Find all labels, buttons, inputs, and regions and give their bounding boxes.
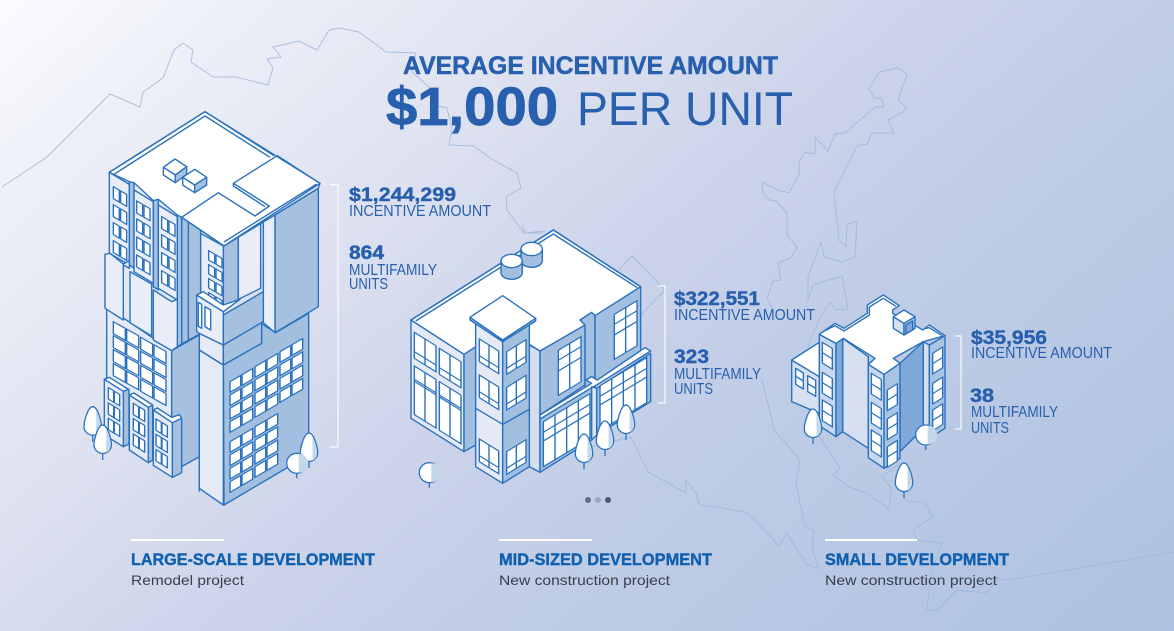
- mid block: [197, 295, 223, 345]
- units: 864: [349, 243, 384, 264]
- center wall: [843, 338, 868, 448]
- roof: [819, 295, 945, 374]
- right wings: [529, 345, 540, 472]
- stats: small development: INCENTIVE AMOUNT: [971, 345, 1112, 362]
- roof: [411, 230, 641, 354]
- bracket: [955, 336, 961, 429]
- per unit: PER UNIT: [577, 82, 793, 135]
- bracket: [330, 184, 338, 447]
- trees: large building: [84, 407, 318, 478]
- caption: small development: New construction project: [825, 572, 997, 588]
- stats: large development: UNITS: [349, 276, 388, 293]
- caption: small development: [825, 539, 1010, 588]
- left wing: [792, 360, 819, 413]
- carousel dots: [585, 497, 611, 503]
- caption: large-scale development: [131, 539, 376, 588]
- roof box: [893, 310, 915, 335]
- trees: small building: [804, 409, 937, 498]
- units: 38: [970, 386, 994, 407]
- building: small development: [792, 295, 945, 468]
- stats: small development: UNITS: [971, 420, 1009, 437]
- lower body: [104, 307, 309, 505]
- building: mid-sized development: [411, 230, 651, 483]
- incentive amount: $35,956: [971, 327, 1047, 349]
- front tower: [868, 364, 884, 468]
- tower: [476, 323, 503, 483]
- stats: small development: [955, 327, 1112, 437]
- amount: $1,000: [386, 77, 558, 137]
- caption: mid-sized development: New construction project: [499, 572, 670, 588]
- front bays: [104, 377, 182, 477]
- caption: mid-sized development: MID-SIZED DEVELOPMENT: [499, 550, 713, 569]
- building: large-scale development: [104, 112, 320, 505]
- caption: mid-sized development: [499, 539, 713, 588]
- caption: small development: SMALL DEVELOPMENT: [825, 550, 1010, 569]
- left tower: [819, 334, 836, 437]
- trees: mid building: [419, 405, 635, 488]
- stats: mid development: UNITS: [674, 381, 713, 398]
- roof tanks: [501, 242, 542, 279]
- stats: large development: [330, 184, 491, 447]
- stats: mid development: [658, 286, 815, 403]
- caption: large-scale development: LARGE-SCALE DEVELOPMENT: [131, 550, 376, 569]
- stats: mid development: MULTIFAMILY: [674, 366, 761, 383]
- roof boxes: [163, 159, 207, 193]
- title: [386, 52, 793, 137]
- roof: [109, 112, 320, 246]
- stats: large development: INCENTIVE AMOUNT: [349, 203, 491, 220]
- bracket: [658, 286, 665, 403]
- stats: small development: MULTIFAMILY: [971, 404, 1058, 421]
- caption: large-scale development: Remodel project: [131, 572, 244, 588]
- shopfronts: [540, 385, 592, 472]
- heading: average incentive amount: AVERAGE INCENTIVE AMOUNT: [403, 52, 778, 80]
- incentive amount: $1,244,299: [349, 184, 456, 206]
- incentive amount: $322,551: [674, 288, 760, 310]
- right tower: [929, 336, 945, 438]
- units: 323: [674, 347, 709, 368]
- left wing: [411, 320, 464, 452]
- stats: mid development: INCENTIVE AMOUNT: [674, 307, 815, 324]
- stats: large development: MULTIFAMILY: [349, 262, 437, 279]
- upper body: [105, 112, 320, 351]
